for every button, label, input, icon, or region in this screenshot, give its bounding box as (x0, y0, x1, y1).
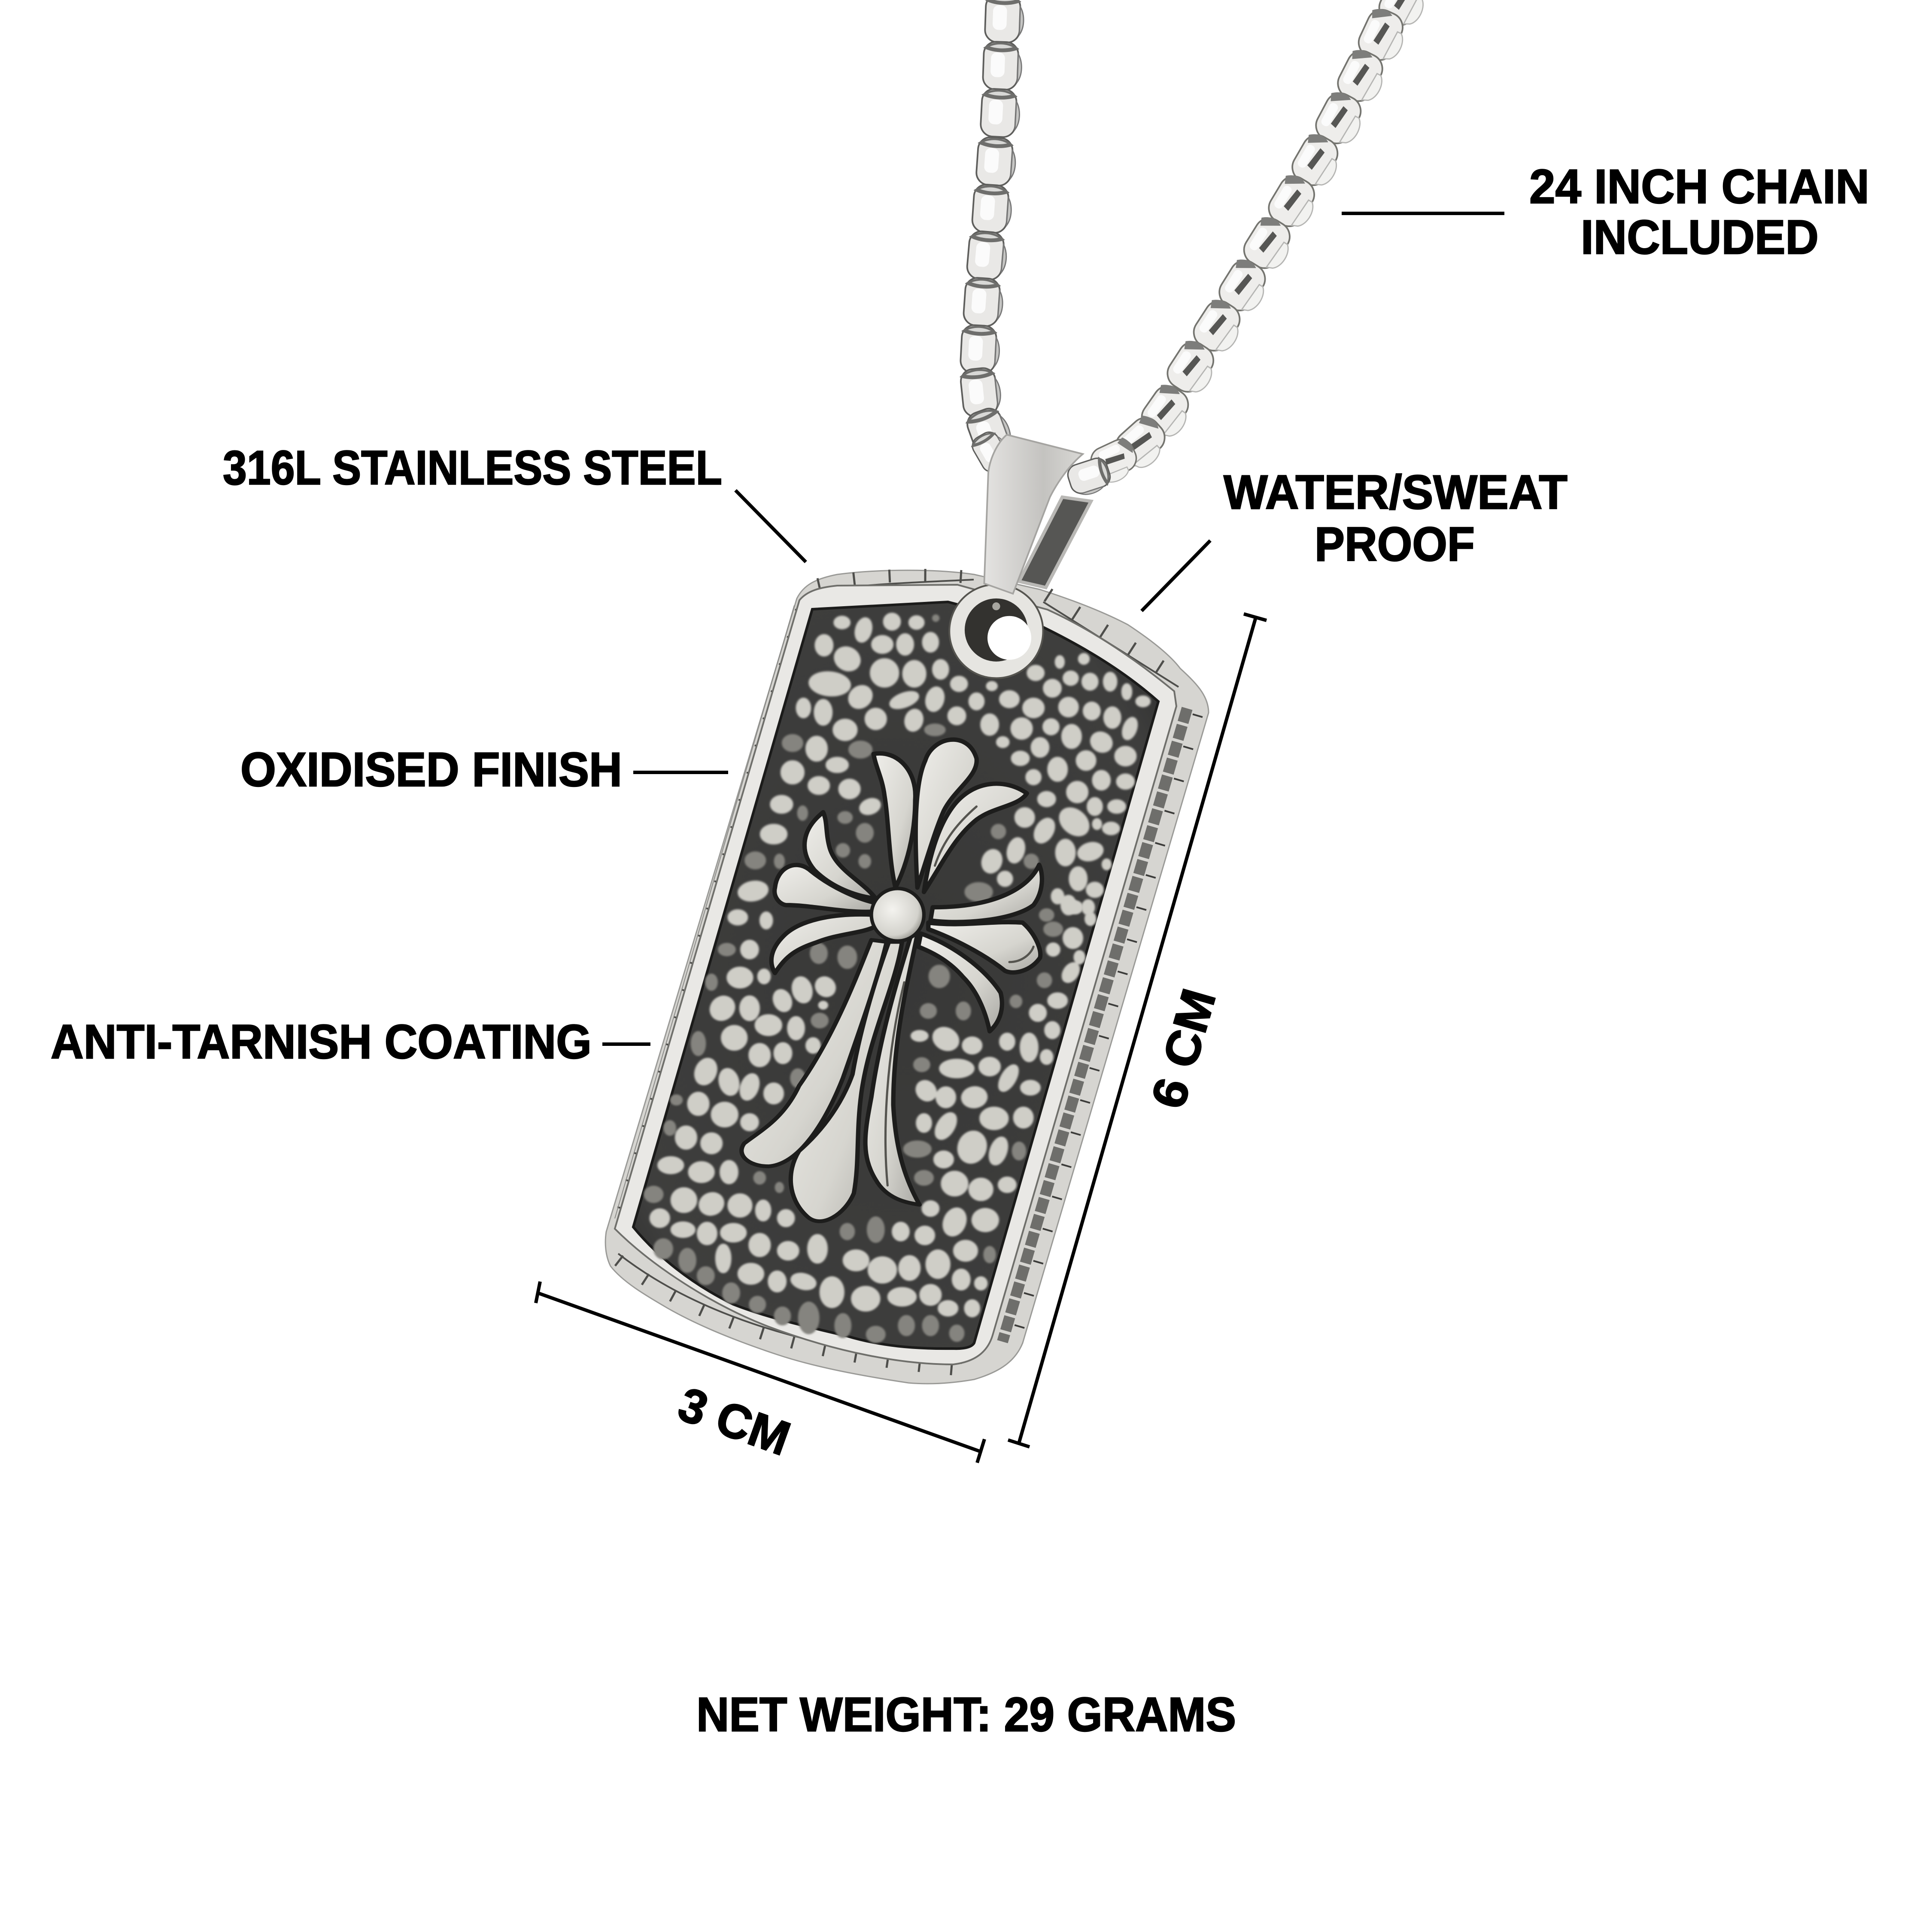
cross: arms and top (772, 740, 1042, 1031)
callout: anti-tarnish coating: ANTI-TARNISH COATING (51, 1015, 592, 1069)
callout: water/sweat proof: PROOF (1315, 517, 1475, 571)
callout: 24 inch chain (1342, 160, 1869, 264)
pendant bail (984, 435, 1091, 594)
pendant (605, 435, 1209, 1384)
callout: water/sweat proof: WATER/SWEAT (1224, 465, 1567, 519)
callout: 316L stainless steel: 316L STAINLESS STEEL (223, 441, 722, 495)
callout: 316L stainless steel (223, 441, 806, 562)
pebble texture, lower half (645, 902, 1095, 1342)
cross: lower stem (741, 934, 920, 1221)
pendant hole ring (949, 584, 1043, 678)
chain: left strand (959, 0, 1024, 476)
dimension: 3 cm width: 3 CM (672, 1377, 797, 1466)
band ticks (615, 575, 1198, 1370)
necklace chain (959, 0, 1433, 499)
dark oxidised panel (633, 602, 1158, 1349)
callout: 24 inch chain: INCLUDED (1581, 210, 1819, 264)
callout: 24 inch chain: 24 INCH CHAIN (1529, 160, 1869, 213)
net weight label: NET WEIGHT: 29 GRAMS (696, 1688, 1236, 1741)
pebble texture, upper half (729, 614, 1149, 936)
callout: water/sweat proof (1142, 465, 1567, 611)
chain: right strand (1065, 0, 1433, 499)
pendant raised rim (615, 585, 1176, 1364)
pendant outer edge (605, 570, 1209, 1384)
dimension: 6 cm height (1008, 614, 1267, 1447)
dimension: 6 cm height: 6 CM (1141, 983, 1226, 1114)
callout: oxidised finish: OXIDISED FINISH (240, 743, 622, 796)
dimension: 3 cm width (536, 1282, 984, 1466)
